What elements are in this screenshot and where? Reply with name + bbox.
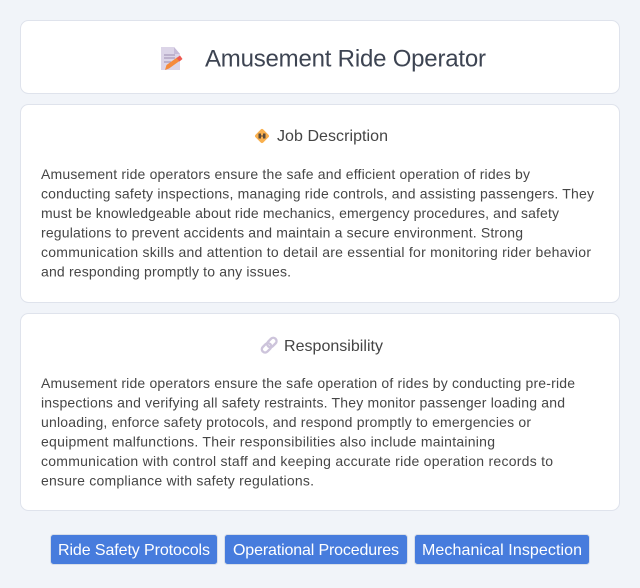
text: responsibility body: equipment malfunctions. Their responsibilities also include maintaining	[41, 434, 495, 450]
heading: responsibility: Responsibility	[284, 338, 383, 355]
text: responsibility body: unloading, enforce safety protocols, and respond promptly to emergencies or	[41, 414, 531, 430]
tag: ride safety protocols	[50, 534, 218, 564]
tag: operational procedures	[224, 534, 408, 564]
panel: responsibility	[20, 314, 620, 510]
text: responsibility body	[41, 375, 575, 488]
text: job description body: Amusement ride operators ensure the safe and efficient operation of rides by	[41, 166, 530, 182]
text: responsibility body: communication with control staff and keeping accurate ride operation records to	[41, 453, 553, 469]
text: job description body: and responding promptly to any issues.	[41, 264, 291, 280]
icon: chain link	[261, 337, 278, 354]
text: job description body	[41, 166, 594, 280]
tag: operational procedures: Operational Procedures	[233, 542, 399, 559]
icon: document with pencil	[161, 47, 182, 70]
heading: job description: Job Description	[277, 128, 388, 145]
panel: job description	[20, 104, 620, 302]
text: responsibility body: ensure compliance with safety regulations.	[41, 472, 314, 488]
text: responsibility body: Amusement ride operators ensure the safe operation of rides by conducting pre-ride	[41, 375, 575, 391]
text: job description body: regulations to prevent accidents and maintain a secure environment. Strong	[41, 224, 523, 240]
tag: mechanical inspection	[414, 534, 590, 564]
text: job description body: must be knowledgeable about ride mechanics, emergency procedures, and safety	[41, 205, 559, 221]
icon: diamond sign	[254, 128, 270, 144]
text: job description body: communication skills and attention to detail are essential for monitoring rider behavior	[41, 244, 591, 260]
panel: title	[20, 20, 620, 94]
text: responsibility body: inspections and verifying all safety restraints. They monitor passenger loading and	[41, 394, 565, 410]
heading: page title: Amusement Ride Operator	[205, 46, 486, 72]
tag: ride safety protocols: Ride Safety Protocols	[58, 542, 210, 559]
tag: mechanical inspection: Mechanical Inspection	[422, 542, 582, 559]
text: job description body: conducting safety inspections, managing ride controls, and assisting passengers. They	[41, 186, 594, 202]
